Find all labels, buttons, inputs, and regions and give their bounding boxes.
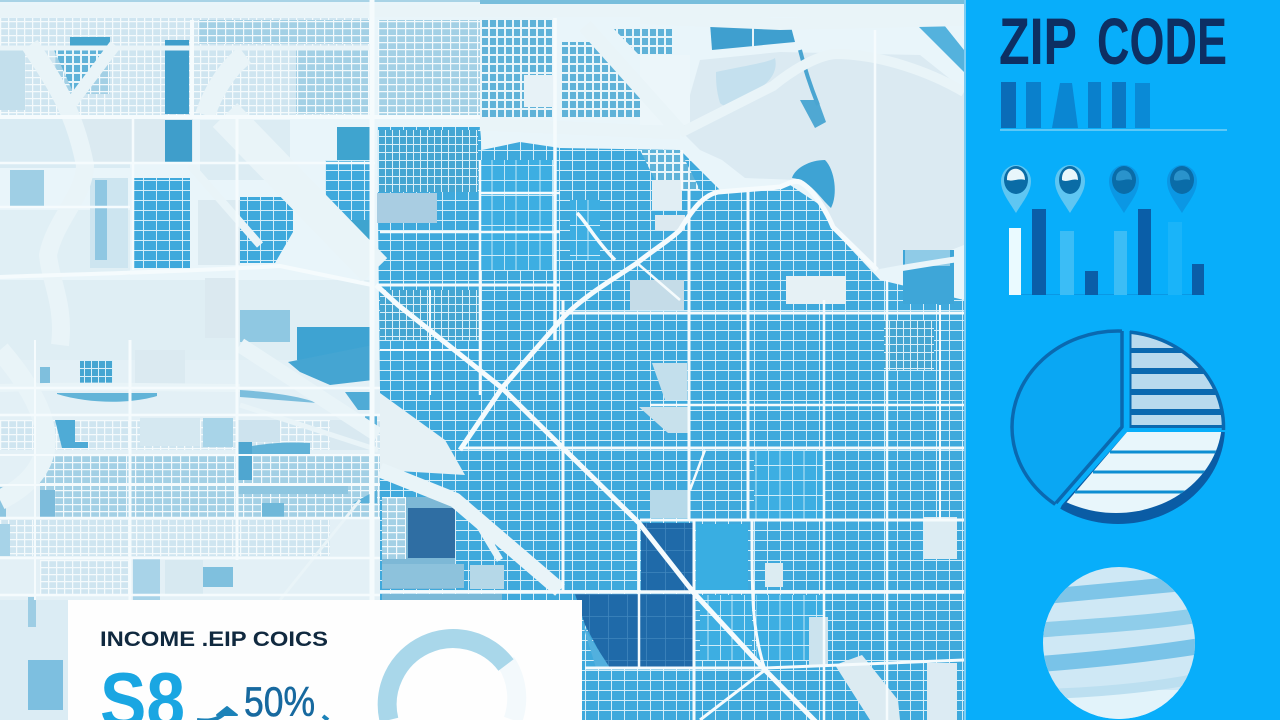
icon: map pin 3 bbox=[1109, 165, 1139, 213]
map: top blue blocks bbox=[0, 0, 964, 118]
donut chart bbox=[387, 639, 517, 720]
panel: income zip codes card bbox=[68, 600, 582, 720]
map: pale southwest districts bbox=[0, 350, 380, 720]
pie: lower striped slice bbox=[1066, 432, 1222, 513]
map: highest income zip code blocks bbox=[575, 523, 694, 668]
icon: rising arrow bbox=[197, 707, 328, 720]
pie: plain slice bbox=[1010, 329, 1124, 506]
icon: map pin 1 bbox=[1001, 165, 1031, 213]
map: southwest river strip and dark zip code bbox=[382, 497, 504, 600]
map: wide pale corridors bbox=[0, 11, 964, 600]
title: zip code bbox=[999, 4, 1227, 78]
icon: map pin 2 bbox=[1055, 165, 1085, 213]
map: major roads bbox=[0, 0, 964, 720]
pie chart bbox=[1012, 325, 1232, 530]
subtitle: blurred lettering bbox=[1001, 82, 1150, 128]
divider bbox=[1000, 129, 1227, 131]
heading: income zip codes: INCOME .EIP COICS bbox=[100, 627, 328, 651]
panel: blue sidebar bbox=[964, 0, 1227, 720]
map: main blue city grid bbox=[377, 127, 964, 720]
striped disc bbox=[1040, 565, 1200, 720]
icon: map pin 4 bbox=[1167, 165, 1197, 213]
pie: upper striped slice bbox=[1130, 330, 1226, 430]
map: pale parks in city grid bbox=[377, 193, 957, 720]
map: large-block bright zones bbox=[378, 130, 934, 661]
title: zip code: ZIP bbox=[999, 4, 1077, 78]
bar chart bbox=[1009, 209, 1205, 295]
map: pale northwest districts bbox=[0, 18, 480, 360]
map: darkest west district bbox=[408, 508, 455, 558]
map: pale northeast parkland bbox=[524, 50, 964, 310]
map: blue patches west bbox=[0, 37, 377, 556]
map: zip code choropleth bbox=[0, 0, 964, 720]
pie: lower rim bbox=[1060, 432, 1225, 524]
